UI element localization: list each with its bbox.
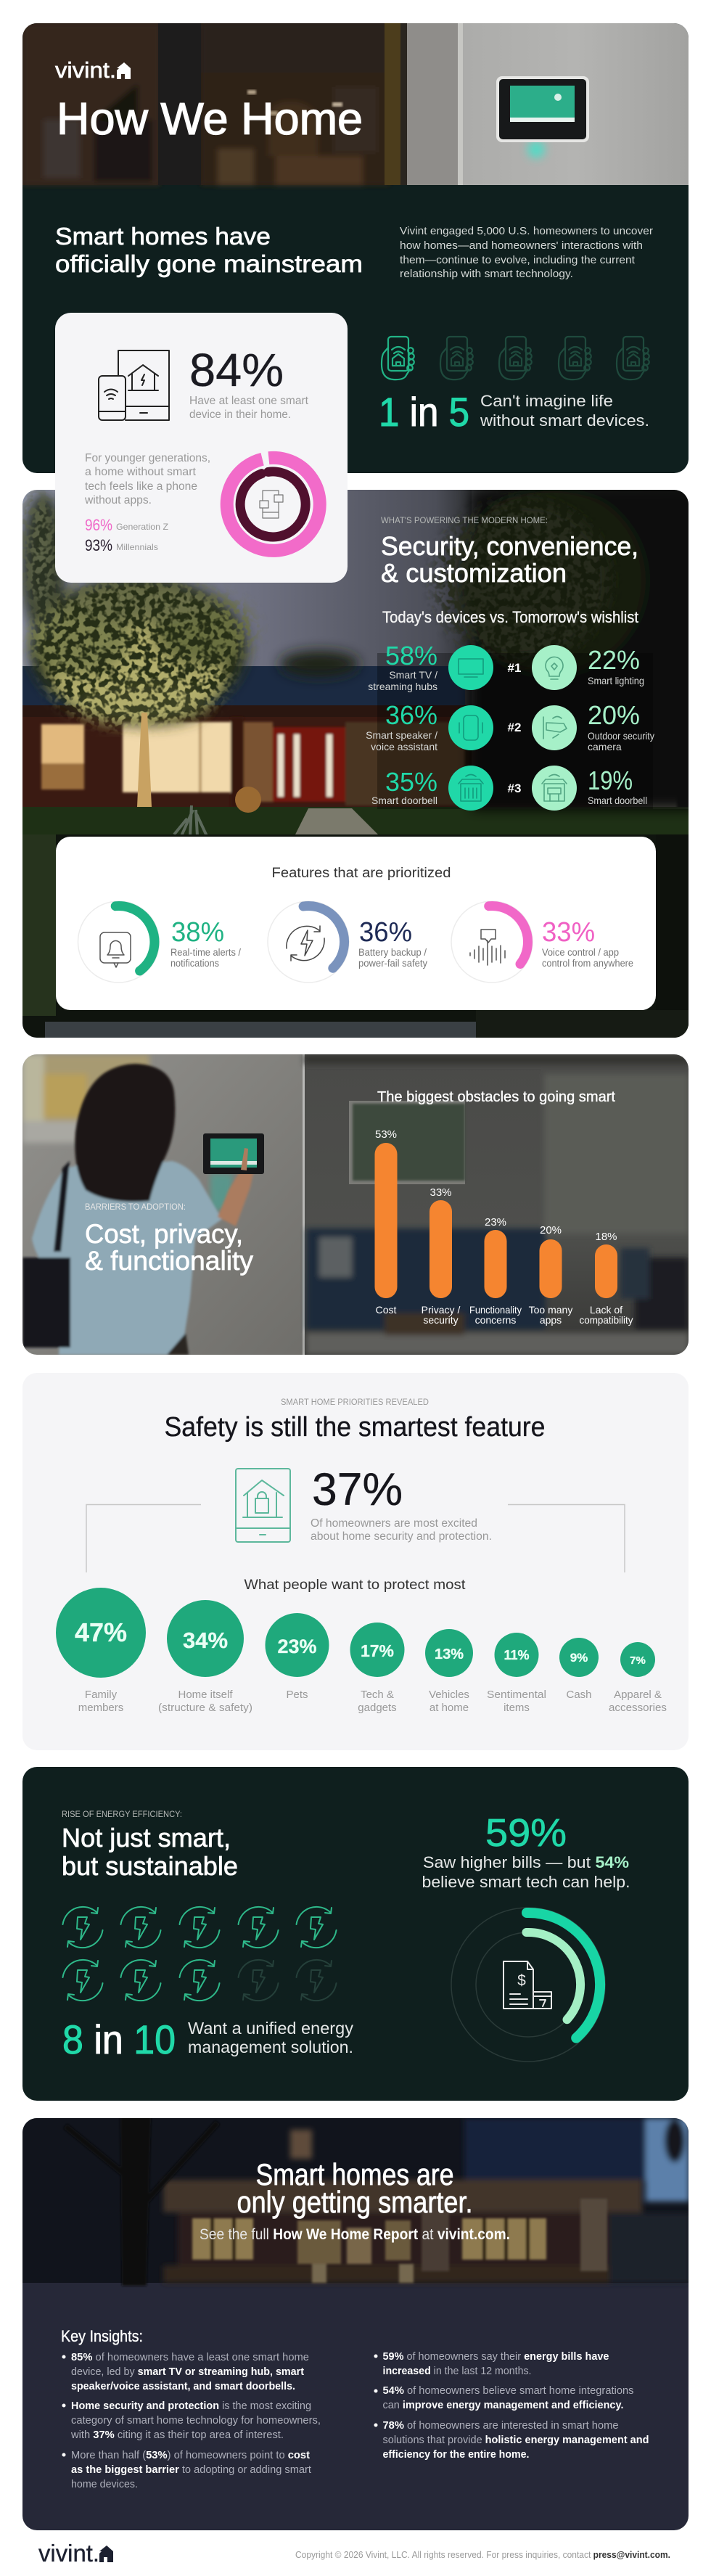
panel: hero intro card [22, 23, 689, 473]
hero photo: interior and wall panel [22, 23, 689, 185]
stat caption [311, 1517, 492, 1543]
key insights left column: as the biggest barrier to adopting or adding smart [71, 2464, 312, 2476]
heading [85, 1219, 253, 1276]
heading: but sustainable [62, 1851, 238, 1881]
key insights right column: 78% of homeowners are interested in smart home [383, 2419, 618, 2432]
heading: & functionality [85, 1246, 253, 1276]
bubble chart: what people protect: Vehicles [429, 1689, 469, 1701]
subheading [55, 223, 363, 277]
donut chart: generations [227, 458, 320, 551]
bar chart: obstacles: apps [540, 1314, 562, 1326]
key insights heading: Key Insights: [61, 2327, 143, 2345]
ranking row 3: #3 [508, 782, 521, 795]
stat: generation Z: Generation Z [116, 522, 168, 532]
bubble chart: what people protect: Apparel & [614, 1689, 662, 1701]
title: How We Home [57, 94, 363, 144]
feature: real-time alerts: Real-time alerts / [170, 947, 241, 958]
heading: Safety is still the smartest feature [164, 1412, 546, 1443]
key insights right column [374, 2350, 649, 2461]
ranking row 3: 35% [385, 767, 437, 797]
bubble chart: what people protect: 17% [361, 1641, 394, 1660]
bubble chart: what people protect: 9% [570, 1651, 588, 1665]
bubble chart: what people protect: (structure & safety) [158, 1702, 252, 1714]
ring chart with bill icon: $ [517, 1972, 526, 1989]
panel: safety priorities [22, 1373, 689, 1750]
key insights right column: solutions that provide holistic energy management and [383, 2434, 649, 2446]
stat: 8 in 10: Want a unified energy [188, 2019, 353, 2038]
report link text: See the full How We Home Report at vivint.com. [200, 2226, 510, 2243]
feature: battery backup: 36% [359, 917, 412, 948]
bubble chart: what people protect: 47% [75, 1617, 127, 1647]
stat: millennials [85, 536, 158, 554]
bar chart: obstacles: compatibility [579, 1314, 633, 1326]
key insights right column: 59% of homeowners say their energy bills have [383, 2350, 609, 2363]
bar chart: obstacles [374, 1128, 633, 1326]
eyebrow: SMART HOME PRIORITIES REVEALED [281, 1398, 429, 1407]
generations text [84, 452, 210, 506]
subheading: Smart homes have [55, 223, 271, 250]
key insights right column: 54% of homeowners believe smart home integrations [383, 2384, 634, 2397]
ranking row 3: Smart doorbell [588, 795, 647, 806]
bubble chart: what people protect: Tech & [361, 1689, 394, 1701]
bubble chart: what people protect: gadgets [358, 1702, 397, 1714]
logo: vivint: vivint. [55, 57, 116, 83]
ranking row 1 [368, 641, 644, 692]
generations text: tech feels like a phone [85, 480, 197, 493]
ranking row 3: 19% [588, 766, 633, 795]
footer copyright: Copyright © 2026 Vivint, LLC. All rights reserved. For press inquiries, contact press@vivint.com. [295, 2550, 670, 2560]
bubble chart: what people protect: 34% [183, 1628, 228, 1653]
key insights left column: device, led by smart TV or streaming hub, smart [71, 2366, 304, 2378]
heading: Cost, privacy, [85, 1219, 243, 1249]
heading [62, 1823, 238, 1881]
stat: 1 in 5: Can't imagine life [480, 392, 613, 410]
ranking row 2: voice assistant [371, 741, 437, 752]
closing heading [237, 2157, 473, 2219]
ranking row 1: 58% [385, 641, 437, 670]
stat: 37 percent: 37% [312, 1464, 403, 1515]
bubble chart: what people protect [56, 1588, 667, 1714]
ranking row 3: Smart doorbell [371, 795, 437, 806]
ranking row 2: Outdoor security [588, 730, 654, 742]
stat: 8 in 10: 8 in 10 [62, 2017, 176, 2062]
eyebrow: WHAT'S POWERING THE MODERN HOME: [381, 517, 548, 525]
key insights left column: speaker/voice assistant, and smart doorbells. [71, 2380, 295, 2392]
bar chart: obstacles: 23% [485, 1216, 506, 1228]
ranking row 2: 36% [385, 700, 437, 730]
ranking row 1: Smart TV / [389, 669, 437, 681]
ranking row 2 [366, 700, 654, 752]
eyebrow: RISE OF ENERGY EFFICIENCY: [62, 1810, 182, 1819]
stat: 1 in 5: 1 in 5 [379, 389, 469, 435]
bubble chart: what people protect: at home [430, 1702, 469, 1714]
key insights left column: with 37% citing it as their top area of interest. [70, 2429, 284, 2441]
icon: tablet with home lock [236, 1469, 290, 1542]
feature: voice control: control from anywhere [542, 958, 633, 969]
subheading: What people want to protect most [244, 1578, 466, 1593]
eyebrow: BARRIERS TO ADOPTION: [85, 1203, 186, 1212]
stat caption: device in their home. [189, 409, 291, 421]
heading: & customization [381, 558, 567, 588]
ranking row 1: streaming hubs [368, 681, 437, 692]
bubble chart: what people protect: 23% [277, 1636, 317, 1657]
key insights left column: 85% of homeowners have a least one smart home [71, 2351, 309, 2363]
wall control panel device [496, 76, 589, 158]
bar chart: obstacles: Lack of [590, 1304, 622, 1316]
ranking row 3 [371, 766, 647, 811]
ranking row 2: #2 [508, 721, 521, 734]
photo: craftsman house at night [22, 2118, 689, 2283]
feature: voice control: 33% [542, 917, 595, 948]
feature: battery backup: power-fail safety [358, 958, 427, 969]
key insights right column: can improve energy management and efficiency. [383, 2399, 624, 2411]
bubble chart: what people protect: items [504, 1702, 530, 1714]
bar chart: obstacles: Too many [529, 1304, 572, 1316]
bar chart: obstacles: 18% [595, 1231, 617, 1243]
panel: closing and key insights [22, 2118, 689, 2530]
intro paragraph: them—continue to evolve, including the current [400, 254, 636, 266]
panel: barriers to adoption [22, 1054, 689, 1355]
photo: woman using wall panel [22, 1054, 689, 1355]
panel background [22, 23, 689, 473]
ring chart with bill icon [451, 1908, 605, 2062]
stat caption [422, 1853, 630, 1891]
feature: voice control [451, 901, 633, 983]
bubble chart: what people protect: Pets [286, 1689, 308, 1701]
key insights left column [62, 2351, 321, 2490]
ranking row 2: 20% [588, 700, 640, 730]
bar chart: obstacles: Privacy / [422, 1304, 460, 1316]
bar chart: obstacles: Cost [376, 1304, 396, 1316]
stat caption: Have at least one smart [189, 395, 309, 407]
intro paragraph: relationship with smart technology. [400, 268, 573, 280]
generations text: without apps. [84, 494, 152, 506]
ranking row 1: #1 [508, 661, 521, 675]
stat caption: Saw higher bills — but 54% [423, 1853, 629, 1871]
feature: battery backup: Battery backup / [358, 947, 427, 958]
features heading: Features that are prioritized [271, 866, 451, 881]
bubble chart: what people protect: accessories [609, 1702, 667, 1714]
bar chart: obstacles: concerns [475, 1314, 516, 1326]
generations text: For younger generations, [85, 452, 210, 464]
panel: 84 percent white card [55, 313, 348, 583]
bubble chart: what people protect: Family [85, 1689, 118, 1701]
intro paragraph: Vivint engaged 5,000 U.S. homeowners to uncover [400, 225, 653, 237]
ranking row 1: 22% [588, 645, 640, 675]
house at dusk photo [22, 486, 696, 1038]
bubble chart: what people protect: 13% [435, 1646, 464, 1662]
icon: tablet and phone [99, 350, 169, 420]
stat: 1 in 5 [379, 389, 649, 435]
feature: battery backup [268, 901, 427, 983]
key insights left column: category of smart home technology for homeowners, [71, 2414, 321, 2427]
ranking row 2: camera [588, 741, 622, 752]
subheading: Today's devices vs. Tomorrow's wishlist [382, 608, 638, 626]
feature: voice control: Voice control / app [542, 947, 619, 958]
stat: millennials: 93% [85, 536, 112, 554]
stat: generation Z: 96% [85, 516, 112, 534]
stat: 8 in 10 [62, 2017, 353, 2062]
key insights right column: increased in the last 12 months. [383, 2365, 531, 2377]
closing heading: only getting smarter. [237, 2185, 473, 2219]
bar chart: obstacles: security [423, 1314, 459, 1326]
generations text: a home without smart [85, 466, 197, 478]
stat caption: about home security and protection. [311, 1530, 492, 1543]
bubble chart: what people protect: members [78, 1702, 123, 1714]
heading: Security, convenience, [381, 531, 638, 561]
footer logo: vivint. [38, 2540, 99, 2567]
ranking row 2: Smart speaker / [366, 729, 437, 741]
bubble chart: what people protect: 11% [504, 1648, 530, 1662]
panel: security, convenience and customization [22, 486, 696, 1038]
stat caption: Of homeowners are most excited [311, 1517, 477, 1530]
bar chart: obstacles: 53% [375, 1128, 397, 1141]
heading [381, 531, 638, 588]
stat: millennials: Millennials [116, 542, 158, 552]
hand and phone icon row [382, 337, 649, 380]
closing heading: Smart homes are [255, 2157, 454, 2191]
key insights left column: home devices. [71, 2478, 138, 2490]
bar chart: obstacles: 33% [430, 1186, 452, 1199]
stat caption [189, 395, 309, 421]
stat: 8 in 10: management solution. [188, 2038, 353, 2056]
stat: generation Z [85, 516, 168, 534]
subheading: officially gone mainstream [55, 250, 363, 277]
bubble chart: what people protect: Home itself [178, 1689, 233, 1701]
bar chart: obstacles: Functionality [469, 1304, 522, 1316]
feature: real-time alerts [78, 901, 241, 983]
ranking row 1: Smart lighting [588, 675, 644, 686]
intro paragraph: how homes—and homeowners' interactions with [400, 239, 643, 252]
stat: 84 percent: 84% [189, 344, 284, 396]
bar chart: obstacles: 20% [540, 1224, 562, 1236]
feature: real-time alerts: 38% [171, 917, 224, 948]
feature: real-time alerts: notifications [170, 958, 219, 969]
bubble chart: what people protect: Sentimental [487, 1689, 546, 1701]
key insights right column: efficiency for the entire home. [383, 2448, 530, 2461]
stat caption: believe smart tech can help. [422, 1873, 630, 1891]
panel: features that are prioritized [56, 837, 656, 1010]
intro paragraph [400, 225, 653, 280]
icon grid: 8 of 10 energy [62, 1907, 337, 2001]
heading: Not just smart, [62, 1823, 231, 1853]
bubble chart: what people protect: Cash [566, 1689, 592, 1701]
bubble chart: what people protect: 7% [630, 1654, 646, 1667]
key insights left column: More than half (53%) of homeowners point to cost [71, 2449, 310, 2461]
stat: 1 in 5: without smart devices. [480, 411, 649, 430]
stat: 59 percent: 59% [485, 1811, 567, 1855]
chart title: The biggest obstacles to going smart [377, 1088, 615, 1105]
key insights left column: Home security and protection is the most exciting [71, 2400, 311, 2412]
panel: energy efficiency [22, 1767, 689, 2101]
